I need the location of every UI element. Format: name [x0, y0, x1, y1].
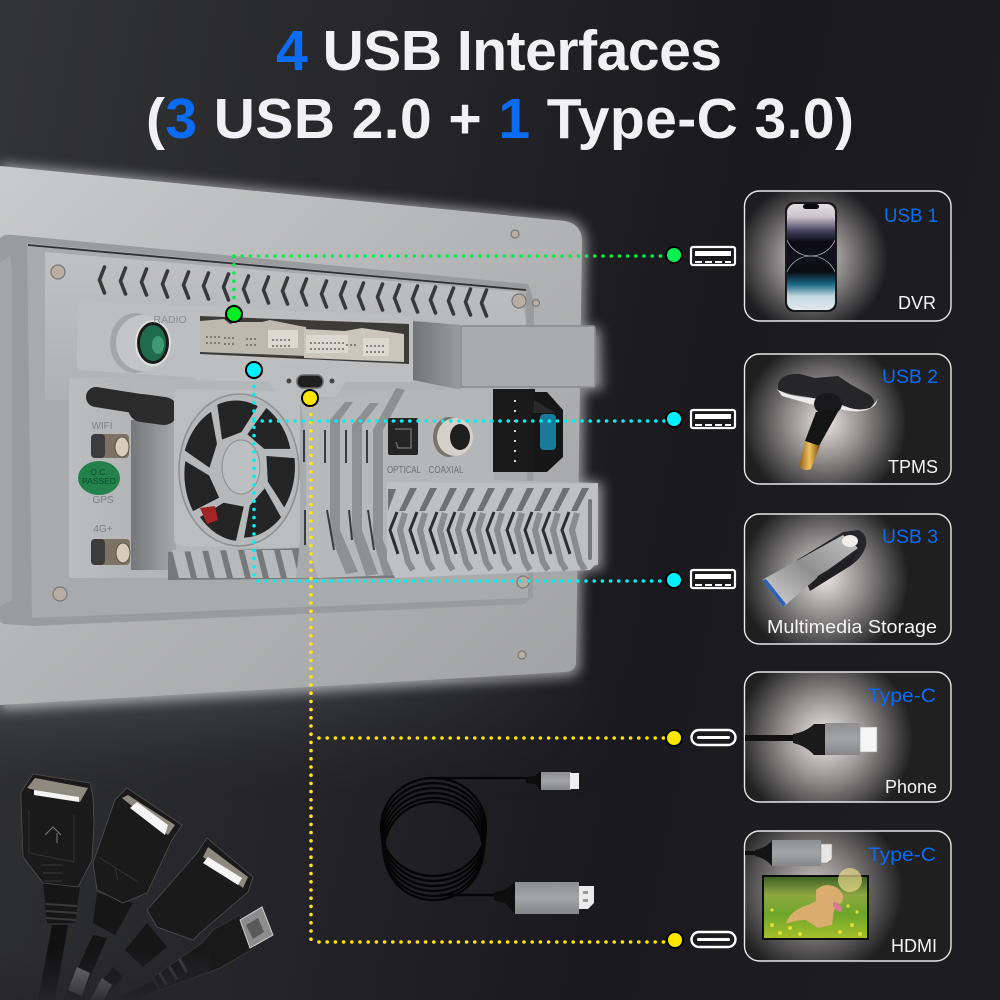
shadow gap beside fan	[130, 420, 176, 570]
heatsink fins right	[387, 482, 598, 578]
coaxial label: COAXIAL	[428, 465, 464, 476]
title line 2: (3 USB 2.0 + 1 Type-C 3.0)	[146, 87, 854, 151]
label: USB 1	[884, 205, 938, 227]
label: USB 2	[882, 366, 938, 388]
radio label: RADIO	[153, 314, 187, 326]
wiring connectors	[200, 316, 409, 364]
type-c cable image	[745, 723, 877, 755]
icon: usb-c port	[692, 730, 736, 745]
usb-c recess	[268, 363, 350, 397]
label: Type-C	[868, 685, 936, 707]
gps label: GPS	[92, 495, 114, 506]
panel reflection	[0, 680, 516, 740]
hdmi to type-c cable	[381, 771, 594, 914]
head unit rear view	[0, 164, 602, 710]
vent slots	[100, 267, 486, 316]
endpoint dot	[666, 730, 682, 746]
card: USB 3 multimedia storage	[744, 514, 951, 644]
left plate	[69, 378, 131, 578]
antenna	[96, 397, 164, 411]
yellow Type-C lines	[311, 398, 670, 942]
USB 3 row	[666, 514, 951, 644]
usb flash drive image	[762, 530, 866, 607]
endpoint dot	[666, 247, 682, 263]
endpoint dot	[667, 932, 683, 948]
4G socket	[91, 539, 130, 565]
cyan source dot	[246, 362, 262, 378]
micro usb cable	[125, 907, 273, 1000]
wifi label: WIFI	[91, 421, 113, 432]
card: USB 2 TPMS	[744, 354, 951, 484]
back plate	[0, 166, 582, 705]
tv photo of dog	[762, 868, 869, 940]
title	[146, 19, 854, 151]
bottom fins under fan	[168, 548, 400, 580]
yellow source dot	[302, 390, 318, 406]
endpoint dot	[666, 572, 682, 588]
tpms sensor image	[777, 374, 878, 470]
label: TPMS	[888, 457, 938, 477]
top vent plate	[45, 252, 530, 400]
optical port	[388, 418, 418, 455]
card: Type-C HDMI	[744, 831, 951, 961]
hdmi plug	[494, 882, 594, 914]
icon: usb port	[691, 247, 735, 265]
green source dot	[226, 306, 242, 322]
optical label: OPTICAL	[387, 465, 421, 476]
label: DVR	[898, 293, 936, 313]
icon: usb port	[691, 410, 735, 428]
fan plate	[174, 389, 300, 548]
card: Type-C phone	[744, 672, 951, 802]
hdmi plug image	[745, 840, 832, 866]
connector lines and hub dots	[226, 256, 670, 942]
icon: usb port	[691, 570, 735, 588]
cable A	[21, 774, 94, 1000]
USB 2 row	[666, 354, 951, 484]
fan	[171, 381, 310, 554]
label: Type-C	[868, 844, 936, 866]
QC passed sticker	[78, 461, 120, 495]
central vertical fins	[296, 388, 405, 578]
endpoint dot	[666, 411, 682, 427]
frame screws	[51, 230, 540, 659]
usb extension cables photo	[0, 774, 273, 1000]
label: Multimedia Storage	[767, 616, 937, 637]
side block	[413, 321, 461, 389]
type-c plug	[526, 771, 579, 791]
wifi socket	[91, 434, 129, 458]
Type-C phone row	[666, 672, 951, 802]
radio socket	[110, 313, 171, 373]
cable C	[87, 838, 253, 1000]
USB 1 row	[666, 191, 951, 321]
phone image	[785, 202, 837, 312]
title line 1: 4 USB Interfaces	[276, 19, 722, 83]
cyan USB 2 and 3 lines	[254, 370, 670, 581]
label: HDMI	[891, 936, 937, 956]
aerial cover	[461, 326, 595, 387]
4G label: 4G+	[93, 524, 113, 535]
label: USB 3	[882, 526, 938, 548]
card: USB 1 DVR	[744, 191, 951, 321]
mounting frame	[0, 235, 534, 626]
green USB 1 line	[234, 256, 670, 314]
Type-C HDMI row	[667, 831, 951, 961]
label: Phone	[885, 777, 937, 797]
icon: usb-c port	[692, 932, 736, 947]
coaxial port	[433, 417, 473, 457]
QC passed sticker: Q.C.	[90, 467, 108, 477]
harness socket	[493, 389, 563, 472]
QC passed sticker: PASSED	[82, 476, 116, 486]
connector plate	[77, 301, 413, 382]
panel glow	[0, 164, 602, 710]
cable B	[63, 788, 182, 1000]
main body	[70, 378, 598, 578]
cable coil	[381, 778, 527, 900]
